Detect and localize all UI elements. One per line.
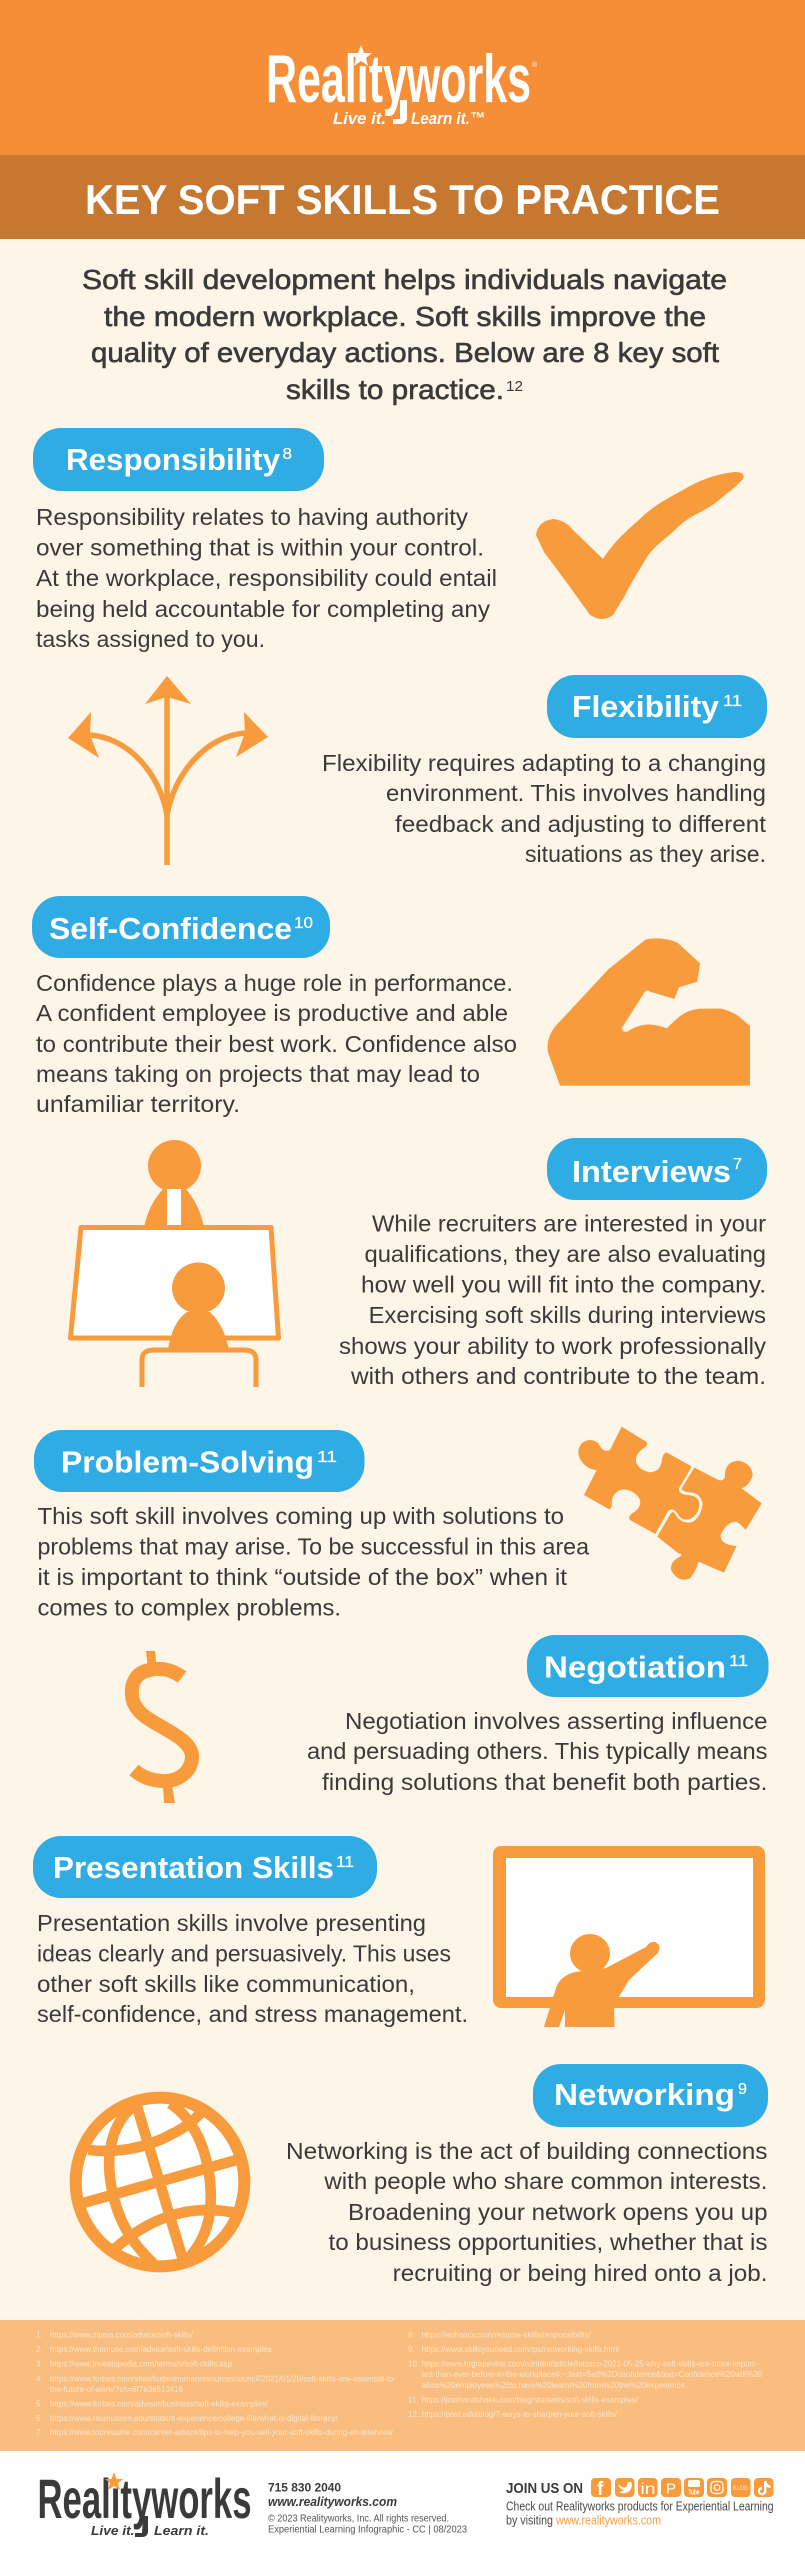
pill heading: responsibility: Responsibility — [66, 442, 281, 477]
logo tagline: Live it. — [333, 109, 386, 128]
reference list left column — [36, 2331, 396, 2437]
body text: responsibility: over something that is within your control. — [36, 535, 484, 561]
icon: blog — [731, 2478, 750, 2497]
body text: networking — [286, 2138, 768, 2286]
icon: three-way arrows — [68, 676, 268, 865]
reference list right column: 9. — [408, 2345, 415, 2354]
intro paragraph: the modern workplace. Soft skills improve the — [104, 301, 706, 332]
pill heading: responsibility — [33, 428, 324, 491]
title band: KEY SOFT SKILLS TO PRACTICE — [85, 176, 720, 223]
reference list left column: 5. — [36, 2400, 43, 2409]
body text: interviews: shows your ability to work professionally — [339, 1333, 767, 1359]
intro paragraph: skills to practice. — [286, 374, 504, 405]
icon: globe — [76, 2098, 244, 2266]
reference list left column: 3. — [36, 2360, 43, 2369]
pill heading: problem-solving: Problem-Solving — [61, 1445, 314, 1480]
footer logo: Learn it. — [154, 2523, 209, 2538]
body text: networking: recruiting or being hired onto a job. — [393, 2260, 768, 2286]
body text: self-confidence — [36, 970, 517, 1117]
reference list left column: 2. — [36, 2345, 43, 2354]
reference list left column: https://www.investopedia.com/terms/s/soft-skills.asp — [50, 2360, 233, 2369]
footer contact block — [268, 2481, 467, 2536]
reference list left column: https://www.themuse.com/advice/soft-skills-definition-examples — [50, 2345, 272, 2354]
icon: check mark — [536, 472, 744, 619]
panel: negotiation — [132, 1635, 768, 1803]
pill heading: problem-solving — [34, 1430, 364, 1492]
body text: responsibility: tasks assigned to you. — [36, 626, 265, 652]
icon: facebook — [591, 2478, 611, 2500]
logo registered mark: ® — [532, 61, 538, 69]
footer logo: Live it. — [91, 2523, 134, 2538]
body text: negotiation: and persuading others. This typically means — [307, 1738, 768, 1764]
footer — [0, 2451, 805, 2560]
reference list left column: https://www.forbes.com/advisor/business/soft-skills-examples/ — [50, 2400, 268, 2409]
body text: problem-solving: This soft skill involves coming up with solutions to — [38, 1503, 564, 1529]
reference list right column: https://enhancv.com/resume-skills/responsibility/ — [422, 2331, 592, 2340]
pill heading: negotiation: Negotiation — [544, 1650, 726, 1685]
icon: pinterest — [661, 2478, 681, 2498]
reference list left column: https://www.zippia.com/advice/soft-skills/ — [50, 2331, 194, 2340]
icon: instagram — [707, 2478, 727, 2497]
body text: networking: Broadening your network opens you up — [348, 2199, 768, 2225]
body text: interviews: qualifications, they are also evaluating — [364, 1241, 766, 1267]
icon: youtube: Tube — [688, 2490, 700, 2496]
join us block: by visiting — [506, 2512, 553, 2527]
body text: flexibility: environment. This involves handling — [386, 780, 766, 806]
icon: blog: BLOG — [733, 2486, 748, 2492]
reference list left column: 6. — [36, 2414, 43, 2423]
body text: presentation skills: ideas clearly and persuasively. This uses — [37, 1941, 451, 1967]
logo y tail — [393, 100, 407, 124]
social icons — [591, 2478, 774, 2500]
footer logo — [38, 2467, 251, 2538]
reference list right column: ant-than-ever-before-in-the-workplace#:~:text=Self%2Dconfidence&text=Confidence%20will%20 — [422, 2370, 763, 2379]
pill heading: problem-solving: 11 — [317, 1449, 337, 1466]
title band — [0, 155, 805, 239]
pill heading: negotiation: 11 — [729, 1653, 748, 1670]
panel: responsibility — [33, 428, 744, 652]
body text: self-confidence: to contribute their best work. Confidence also — [36, 1031, 517, 1057]
icon: youtube — [684, 2478, 704, 2497]
pill heading: flexibility — [547, 675, 767, 738]
join us block: JOIN US ON — [506, 2480, 583, 2497]
icon: tiktok — [754, 2478, 774, 2497]
pill heading: presentation skills — [33, 1836, 377, 1898]
body text: self-confidence: Confidence plays a huge role in performance. — [36, 970, 513, 996]
footer contact block: 715 830 2040 — [268, 2481, 341, 2495]
body text: presentation skills: self-confidence, and stress management. — [37, 2001, 468, 2027]
references band — [0, 2320, 805, 2451]
join us block: www.realityworks.com — [555, 2512, 661, 2527]
body text: responsibility — [36, 504, 497, 652]
panel: interviews — [70, 1138, 767, 1389]
pill heading: networking — [533, 2064, 768, 2127]
reference list right column: https://joinhandshake.com/blog/students/soft-skills-examples/ — [422, 2396, 639, 2405]
body text: presentation skills — [37, 1910, 468, 2027]
pill heading: networking: Networking — [554, 2077, 735, 2112]
body text: negotiation: Negotiation involves asserting influence — [345, 1708, 768, 1734]
icon: linkedin — [638, 2478, 658, 2498]
reference list left column: https://www.topresume.com/career-advice/tips-to-help-you-sell-your-soft-skills-during-an-interview — [50, 2428, 393, 2437]
reference list right column: 10. — [408, 2360, 419, 2369]
pill heading: interviews: Interviews — [572, 1154, 731, 1189]
body text: networking: to business opportunities, whether that is — [328, 2229, 768, 2255]
body text: negotiation: finding solutions that benefit both parties. — [322, 1769, 768, 1795]
icon: interview across a desk — [70, 1140, 278, 1387]
intro paragraph — [82, 264, 727, 405]
interviewer — [144, 1140, 204, 1228]
body text: flexibility — [322, 750, 767, 867]
logo tagline: Learn it.™ — [411, 109, 485, 128]
intro paragraph: 12 — [506, 378, 523, 395]
body text: interviews — [339, 1211, 767, 1389]
intro paragraph: Soft skill development helps individuals navigate — [82, 264, 727, 295]
pill heading: interviews: 7 — [733, 1156, 742, 1173]
icon: pinterest: P — [666, 2480, 676, 2498]
body text: networking: Networking is the act of building connections — [286, 2138, 768, 2164]
body text: problem-solving: comes to complex problems. — [38, 1595, 341, 1621]
reference list left column: the-future-of-work/?sh=6f7e3a513416 — [50, 2385, 184, 2394]
reference list left column: https://www.forbes.com/sites/forbeshumanresourcescouncil/2021/01/20/soft-skills-are-essential-to- — [50, 2375, 396, 2384]
pill heading: flexibility: Flexibility — [572, 689, 720, 724]
pill heading: interviews — [547, 1138, 767, 1200]
pill heading: presentation skills: 11 — [336, 1854, 354, 1871]
body text: negotiation — [307, 1708, 768, 1795]
icon: presenter at board — [493, 1846, 765, 2027]
pill heading: flexibility: 11 — [723, 693, 742, 710]
body text: presentation skills: other soft skills like communication, — [37, 1971, 415, 1997]
panel: networking — [76, 2064, 768, 2286]
body text: presentation skills: Presentation skills involve presenting — [37, 1910, 426, 1936]
body text: problem-solving: it is important to think “outside of the box” when it — [38, 1564, 568, 1590]
intro paragraph: quality of everyday actions. Below are 8 key soft — [91, 337, 719, 368]
reference list left column: https://www.rasmussen.edu/student-experience/college-life/what-is-digital-literacy/ — [50, 2414, 338, 2423]
body text: flexibility: feedback and adjusting to different — [395, 811, 767, 837]
body text: interviews: how well you will fit into the company. — [361, 1272, 766, 1298]
footer contact block: Experiential Learning Infographic - CC | 08/2023 — [268, 2525, 467, 2536]
reference list right column: 8. — [408, 2331, 415, 2340]
reference list left column: 4. — [36, 2375, 43, 2384]
body text: problem-solving: problems that may arise. To be successful in this area — [38, 1534, 589, 1560]
candidate — [142, 1262, 256, 1387]
icon: flexed arm — [547, 938, 750, 1086]
icon: puzzle pieces — [578, 1427, 762, 1580]
panel: self-confidence — [32, 896, 750, 1117]
pill heading: self-confidence: 10 — [294, 915, 313, 932]
icon: facebook: f — [597, 2479, 604, 2500]
body text: flexibility: Flexibility requires adapting to a changing — [322, 750, 766, 776]
pill heading: presentation skills: Presentation Skills — [53, 1850, 334, 1885]
body text: responsibility: Responsibility relates to having authority — [36, 504, 469, 530]
logo tagline — [333, 109, 485, 128]
pill heading: negotiation — [527, 1635, 768, 1697]
panel: presentation skills — [33, 1836, 765, 2027]
reference list right column: 11. — [408, 2396, 419, 2405]
reference list right column: https://www.hrgrapevine.com/content/article/hassco-2021-05-25-why-soft-skills-are-more-import- — [422, 2360, 757, 2369]
pill heading: self-confidence — [32, 896, 330, 958]
footer logo: Realityworks — [38, 2467, 251, 2530]
body text: responsibility: being held accountable for completing any — [36, 596, 491, 622]
body text: problem-solving — [38, 1503, 589, 1621]
footer contact block: www.realityworks.com — [268, 2494, 397, 2509]
logo star — [350, 45, 372, 66]
reference list right column — [408, 2331, 763, 2419]
body text: networking: with people who share common interests. — [323, 2168, 767, 2194]
body text: interviews: While recruiters are interested in your — [372, 1211, 766, 1237]
reference list right column: allow%20employees%20to,have%20learnt%20from%20the%20experience. — [422, 2381, 687, 2390]
body text: flexibility: situations as they arise. — [525, 841, 766, 867]
body text: interviews: with others and contribute to the team. — [350, 1363, 766, 1389]
panel: problem-solving — [34, 1427, 762, 1621]
reference list right column: https://www.skillsyouneed.com/ips/networking-skills.html — [422, 2345, 619, 2354]
icon: dollar sign — [132, 1651, 192, 1803]
body text: self-confidence: A confident employee is productive and able — [36, 1000, 508, 1026]
body text: interviews: Exercising soft skills during interviews — [369, 1302, 766, 1328]
reference list right column: 12. — [408, 2410, 419, 2419]
icon: linkedin: in — [640, 2481, 656, 2498]
footer contact block: © 2023 Realityworks, Inc. All rights reserved. — [268, 2514, 449, 2525]
body text: self-confidence: means taking on projects that may lead to — [36, 1061, 480, 1087]
pill heading: self-confidence: Self-Confidence — [49, 911, 292, 946]
panel: flexibility — [68, 675, 767, 867]
icon: twitter — [615, 2478, 634, 2497]
logo wordmark: Realityworks — [266, 41, 531, 117]
reference list right column: https://post.edu/blog/7-ways-to-sharpen-your-soft-skills/ — [422, 2410, 618, 2419]
pill heading: networking: 9 — [738, 2081, 747, 2098]
body text: responsibility: At the workplace, responsibility could entail — [36, 565, 497, 591]
header band with logo — [0, 0, 805, 155]
join us block — [506, 2478, 774, 2527]
desk — [70, 1228, 278, 1338]
pill heading: responsibility: 8 — [282, 446, 292, 463]
body text: self-confidence: unfamiliar territory. — [36, 1091, 240, 1117]
reference list left column: 7. — [36, 2428, 43, 2437]
reference list left column: 1. — [36, 2331, 43, 2340]
